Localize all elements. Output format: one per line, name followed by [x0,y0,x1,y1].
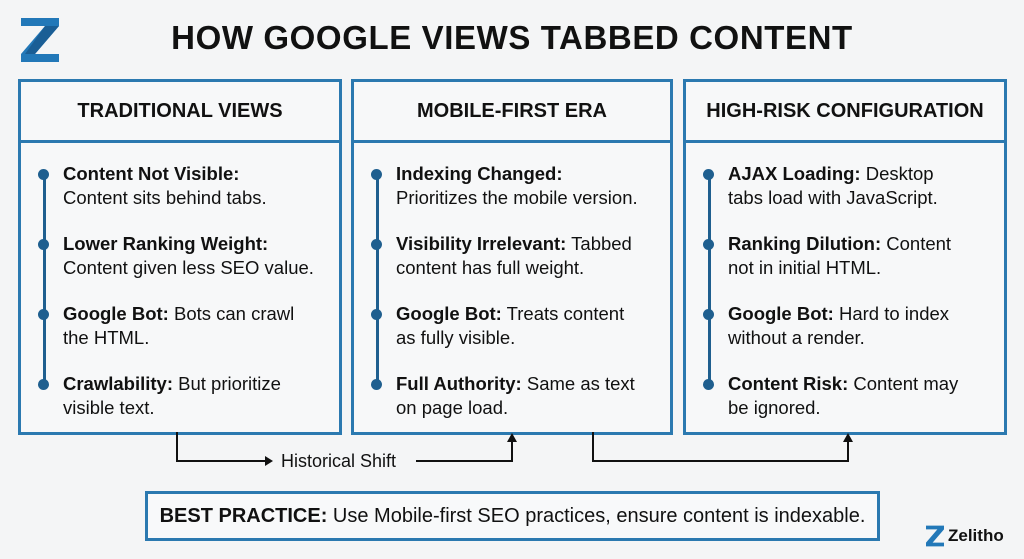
panel: mobile-first era: Google Bot: Treats content as fully visible. [396,303,624,348]
panel: high-risk configuration: AJAX Loading: Desktop tabs load with JavaScript. [728,163,938,208]
panel: mobile-first era: MOBILE-FIRST ERA [417,100,607,122]
arrows: historical shift [176,432,853,466]
panel: high-risk configuration: Ranking Dilution: Content not in initial HTML. [728,233,951,278]
panel: mobile-first era: Prioritizes the mobile version. [396,187,638,208]
best practice callout [145,491,880,541]
panel: mobile-first era [351,79,673,435]
panel: mobile-first era: Full Authority: Same as text on page load. [396,373,635,418]
panel: mobile-first era: Indexing Changed: [396,163,562,184]
panel: traditional views: Content given less SEO value. [63,257,314,278]
panel: high-risk configuration [683,79,1007,435]
brand: Zelitho: Zelitho [948,526,1004,545]
panel: high-risk configuration: HIGH-RISK CONFIGURATION [706,100,984,122]
panel: traditional views: Crawlability: But prioritize visible text. [63,373,281,418]
panel: high-risk configuration: Content Risk: Content may be ignored. [728,373,958,418]
logo: Z [21,18,59,62]
panel: traditional views: Content Not Visible: [63,163,239,184]
panel: traditional views: Lower Ranking Weight: [63,233,268,254]
panel: traditional views: Content sits behind tabs. [63,187,267,208]
panel: traditional views: TRADITIONAL VIEWS [77,100,283,122]
panel: traditional views: Google Bot: Bots can crawl the HTML. [63,303,294,348]
panel: mobile-first era: Visibility Irrelevant: Tabbed content has full weight. [396,233,632,278]
title: HOW GOOGLE VIEWS TABBED CONTENT [171,19,853,56]
panel: traditional views [18,79,342,435]
label: historical shift: Historical Shift [281,451,396,471]
best practice callout: BEST PRACTICE: Use Mobile-first SEO practices, ensure content is indexable. [160,504,865,526]
brand: Zelitho [926,526,1004,546]
panel: high-risk configuration: Google Bot: Hard to index without a render. [728,303,949,348]
